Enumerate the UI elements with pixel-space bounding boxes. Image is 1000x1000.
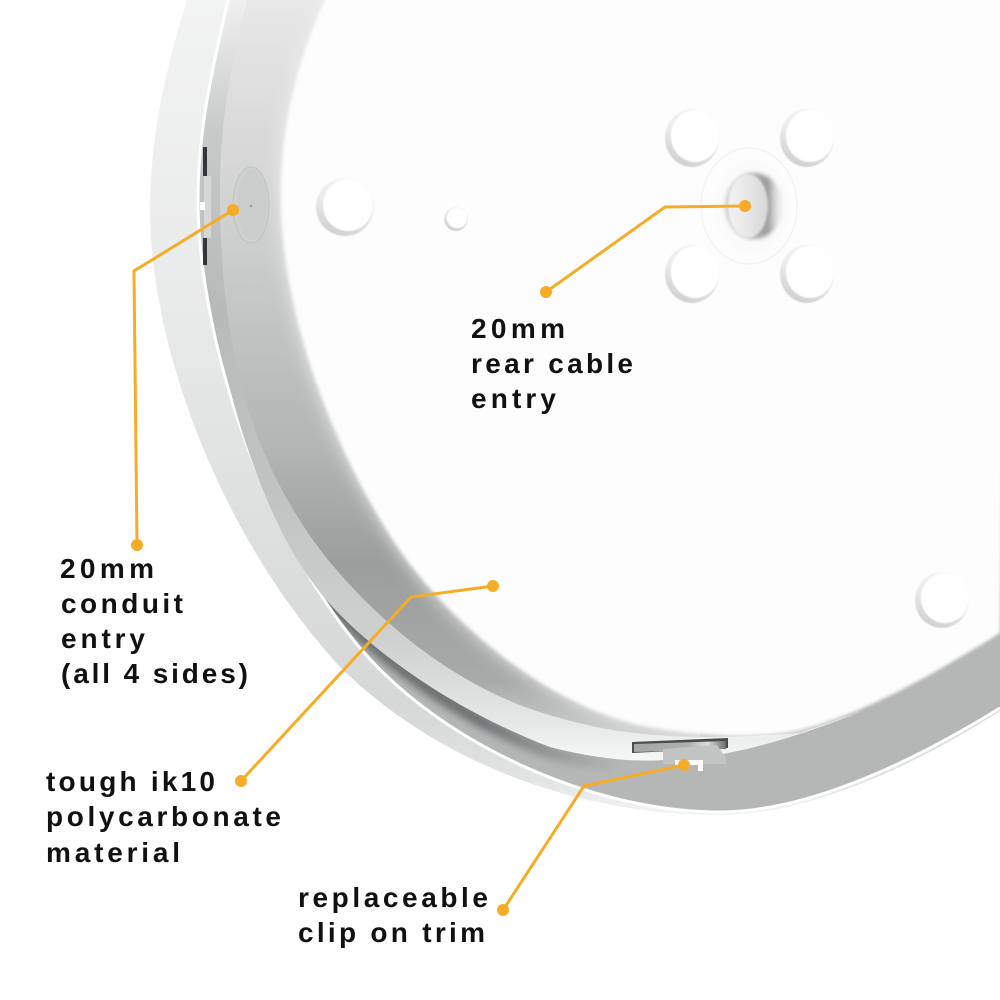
rear cable entry <box>701 148 797 264</box>
label: conduit entry: 20mm <box>60 553 154 584</box>
peg: top left <box>665 109 719 167</box>
label: replaceable clip <box>298 882 488 948</box>
outer trim <box>150 0 1000 815</box>
plate soft edge <box>276 124 700 737</box>
conduit knockout <box>233 167 269 243</box>
inner grey wall <box>220 0 1000 737</box>
callout: conduit entry <box>131 204 239 551</box>
trim recess <box>198 0 1000 812</box>
callout: rear cable entry <box>540 200 751 298</box>
label: polycarbonate material: tough ik10 <box>46 766 215 797</box>
label: polycarbonate material: material <box>46 837 180 868</box>
callout: replaceable clip <box>497 759 690 916</box>
side slot dark <box>200 147 211 265</box>
peg: top right <box>780 109 834 167</box>
label: polycarbonate material: polycarbonate <box>46 801 281 832</box>
label: rear cable entry <box>471 313 633 414</box>
peg: small <box>444 207 468 231</box>
white trim edge line <box>198 0 1000 812</box>
label: conduit entry <box>60 553 248 689</box>
label: conduit entry: conduit <box>61 588 183 619</box>
label: conduit entry: entry <box>61 623 145 654</box>
label: polycarbonate material <box>46 766 281 868</box>
peg: bottom right <box>780 245 834 303</box>
light fitting rear view <box>150 0 1000 815</box>
replaceable clip <box>632 738 728 771</box>
label: replaceable clip: clip on trim <box>298 917 485 948</box>
peg: lower right <box>915 572 969 628</box>
dark shadow gap <box>324 598 602 767</box>
peg: bottom left <box>665 245 719 303</box>
label: rear cable entry: rear cable <box>471 348 633 379</box>
label: conduit entry: (all 4 sides) <box>61 658 248 689</box>
callout: polycarbonate material <box>235 580 499 787</box>
label: rear cable entry: 20mm <box>471 313 565 344</box>
label: replaceable clip: replaceable <box>298 882 488 913</box>
mounting plate <box>281 0 1000 735</box>
label: rear cable entry: entry <box>471 383 556 414</box>
inner ring <box>203 0 1000 761</box>
peg: left <box>316 178 374 236</box>
